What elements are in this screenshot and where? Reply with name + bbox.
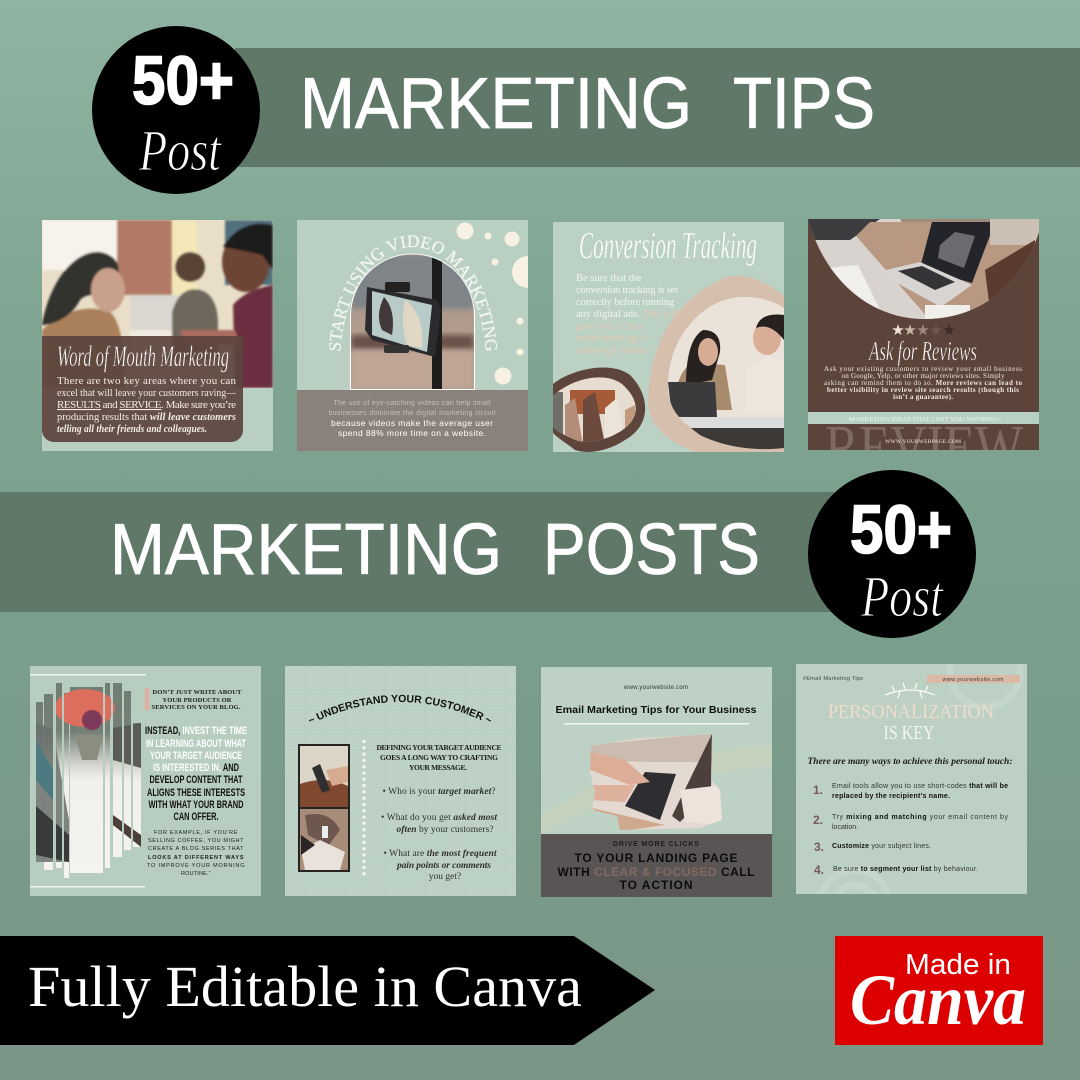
text box: word of mouth: excel that will leave your customers raving—	[57, 387, 237, 399]
body text: any digital ads. This will	[576, 309, 680, 320]
call to action band: DRIVE MORE CLICKS	[613, 841, 699, 848]
caption band	[297, 390, 528, 451]
panel: personalization is key	[796, 664, 1027, 894]
blob: peach background	[648, 276, 784, 452]
example text: TO IMPROVE YOUR MORNING	[147, 863, 245, 869]
body text: give you a clear	[576, 321, 643, 332]
banner title: marketing posts: POSTS	[543, 510, 760, 590]
body text	[576, 273, 680, 356]
question list: • Who is your target market?	[382, 787, 496, 797]
text box: word of mouth: producing results that will leave customers	[57, 411, 236, 423]
numbered list: Email tools allow you to use short-codes that will be	[832, 783, 1008, 790]
numbered list: replaced by the recipient’s name.	[832, 793, 950, 800]
call to action band	[541, 834, 772, 897]
caption band: The use of eye-catching videos can help small	[334, 400, 491, 407]
badge: 50+ post top	[92, 26, 260, 194]
photo: team celebrating	[553, 377, 636, 442]
tag and website: www.yourwebsite.com	[942, 677, 1004, 683]
curved title: ~ UNDERSTAND YOUR CUSTOMER ~	[309, 694, 492, 722]
photo: two colleagues at laptop	[668, 296, 784, 450]
dotted divider	[362, 740, 366, 878]
badge: 50+ post middle: Post	[860, 564, 944, 629]
star rating	[891, 322, 956, 339]
call to action band: TO YOUR LANDING PAGE	[574, 851, 738, 865]
tag and website: #Email Marketing Tips	[803, 676, 863, 682]
panel: ask for reviews	[808, 219, 1039, 450]
body text	[824, 365, 1022, 401]
example text: LOOKS AT DIFFERENT WAYS	[148, 855, 244, 861]
logo: made in canva: Made in	[905, 949, 1011, 981]
heading: Email Marketing Tips for Your Business	[556, 704, 757, 716]
intro text: DEFINING YOUR TARGET AUDIENCE	[376, 743, 502, 752]
banner title: marketing tips: MARKETING	[300, 64, 692, 144]
main statement: ALIGNS THESE INTERESTS	[147, 787, 245, 799]
numbered list	[813, 783, 1008, 877]
body text: on Google, Yelp, or other major reviews sites. Simply	[842, 372, 1005, 380]
panel: blog content tip	[30, 666, 261, 896]
caption band: spend 88% more time on a website.	[338, 428, 486, 438]
heading: ask for reviews: Ask for Reviews	[868, 336, 977, 366]
accent bar	[145, 688, 149, 710]
example text	[147, 830, 245, 877]
tag and website	[803, 675, 1020, 683]
question list	[381, 787, 497, 882]
main statement: YOUR TARGET AUDIENCE	[150, 750, 242, 762]
body text: isn’t a guarantee).	[893, 393, 953, 401]
panel: personalization is key: IS KEY	[884, 722, 934, 744]
banner title: marketing posts: MARKETING	[110, 510, 502, 590]
example text: CREATE A BLOG SERIES THAT	[148, 846, 244, 852]
question list: • What are the most frequent	[384, 849, 497, 859]
main statement: IS INTERESTED IN, AND	[153, 762, 239, 774]
heading: PERSONALIZATION	[828, 701, 994, 723]
badge: 50+ post top: 50+	[132, 42, 234, 119]
heading: conversion tracking: Conversion Tracking	[579, 225, 757, 267]
ghost word: review: REVIEW	[825, 414, 1023, 482]
banner: marketing posts	[0, 492, 870, 612]
logo: made in canva: Canva	[850, 960, 1026, 1040]
mint strip: ~MARKETING IDEAS THAT COST YOU NOTHING~	[846, 416, 1001, 423]
panel: email marketing tips	[541, 667, 772, 897]
numbered list: 2.	[813, 813, 823, 827]
photo: hands on laptop	[590, 734, 722, 830]
question list: pain points or comments	[396, 861, 491, 871]
intro text: YOUR MESSAGE.	[409, 763, 467, 772]
numbered list: Be sure to segment your list by behaviour.	[833, 866, 978, 873]
blob: brown photo frame	[553, 368, 645, 452]
main statement	[145, 725, 247, 823]
arrow banner: fully editable in canva	[0, 936, 655, 1045]
numbered list: 4.	[814, 863, 824, 877]
text box: word of mouth: There are two key areas where you can	[57, 375, 236, 387]
numbered list: Customize your subject lines.	[832, 843, 931, 850]
question list: you get?	[429, 872, 461, 882]
badge: 50+ post middle: 50+	[850, 491, 952, 568]
website: WWW.YOURWEBPAGE.COM	[885, 439, 961, 445]
lead text	[152, 689, 242, 711]
banner title: marketing tips: TIPS	[733, 64, 875, 144]
grid texture	[285, 666, 516, 896]
photo: phone on tripod	[351, 254, 474, 389]
caption band: businesses dominate the digital marketing circuit	[328, 410, 496, 417]
text box: word of mouth: telling all their friends and colleagues.	[57, 423, 207, 435]
example text: FOR EXAMPLE, IF YOU’RE	[154, 830, 238, 836]
star rating: ★	[942, 322, 956, 339]
photo: laptop on desk	[808, 219, 1039, 320]
subheading: There are many ways to achieve this personal touch:	[808, 757, 1012, 767]
body text: asking can remind them to do so. More reviews can lead to	[824, 379, 1022, 387]
example text: SELLING COFFEE, YOU MIGHT	[148, 838, 244, 844]
lead text: SERVICES ON YOUR BLOG.	[152, 704, 241, 711]
main statement: INSTEAD, INVEST THE TIME	[145, 725, 247, 737]
example text: ROUTINE.”	[181, 871, 211, 877]
caption band: because videos make the average user	[331, 418, 493, 428]
white gaps	[53, 683, 133, 873]
intro text: GOES A LONG WAY TO CRAFTING	[380, 753, 498, 762]
main statement: CAN OFFER.	[174, 811, 218, 823]
lead text: DON’T JUST WRITE ABOUT	[152, 689, 242, 696]
decorative dots	[456, 222, 528, 384]
badge: 50+ post middle	[808, 470, 976, 638]
logo: made in canva	[835, 936, 1043, 1045]
main statement: WITH WHAT YOUR BRAND	[148, 799, 244, 811]
body text: correctly before running	[576, 297, 675, 308]
badge: 50+ post top: Post	[138, 118, 222, 183]
photo: colleagues at laptop	[42, 220, 273, 388]
body text: campaign results.	[576, 345, 649, 356]
text box: word of mouth: RESULTS and SERVICE. Make sure you’re	[57, 399, 236, 411]
banner: marketing tips	[235, 48, 1080, 167]
text box: word of mouth	[42, 336, 243, 442]
body text: conversion tracking is set	[576, 285, 678, 296]
call to action band: TO ACTION	[620, 878, 692, 892]
main statement: IN LEARNING ABOUT WHAT	[146, 738, 246, 750]
panel: understand your customer	[285, 666, 516, 896]
main statement: DEVELOP CONTENT THAT	[150, 774, 243, 786]
panel: word of mouth marketing	[42, 220, 273, 451]
star rating: ★	[929, 322, 943, 339]
intro text	[376, 743, 502, 772]
panel: start using video marketing	[297, 220, 528, 451]
question list: • What do you get asked most	[381, 813, 497, 823]
star rating: ★	[903, 322, 917, 339]
body text: Ask your existing customers to review your small business	[824, 365, 1022, 373]
lead text: YOUR PRODUCTS OR	[162, 697, 232, 704]
numbered list: 3.	[814, 840, 824, 854]
body text: understanding of	[576, 333, 647, 344]
curved title: START USING VIDEO MARKETING	[329, 235, 498, 352]
numbered list: Try mixing and matching your email content by	[832, 814, 1008, 821]
panel: conversion tracking	[553, 222, 790, 455]
star rating: ★	[916, 322, 930, 339]
website: www.yourwebsite.com	[623, 685, 688, 691]
call to action band: WITH CLEAR & FOCUSED CALL	[558, 865, 754, 879]
body text: better visibility in review site search results (though this	[827, 386, 1019, 394]
question list: often by your customers?	[396, 825, 494, 835]
body text: Be sure that the	[576, 273, 642, 284]
film strip photos	[298, 744, 350, 872]
star rating: ★	[891, 322, 905, 339]
numbered list: 1.	[813, 783, 823, 797]
arrow banner: fully editable in canva: Fully Editable in Canva	[28, 954, 582, 1019]
text box: word of mouth: Word of Mouth Marketing	[57, 340, 229, 373]
photo: strips of flowers and laptop	[36, 683, 141, 878]
icon: floral sprig	[885, 683, 935, 698]
mint strip	[808, 412, 1039, 424]
numbered list: location.	[832, 824, 858, 831]
